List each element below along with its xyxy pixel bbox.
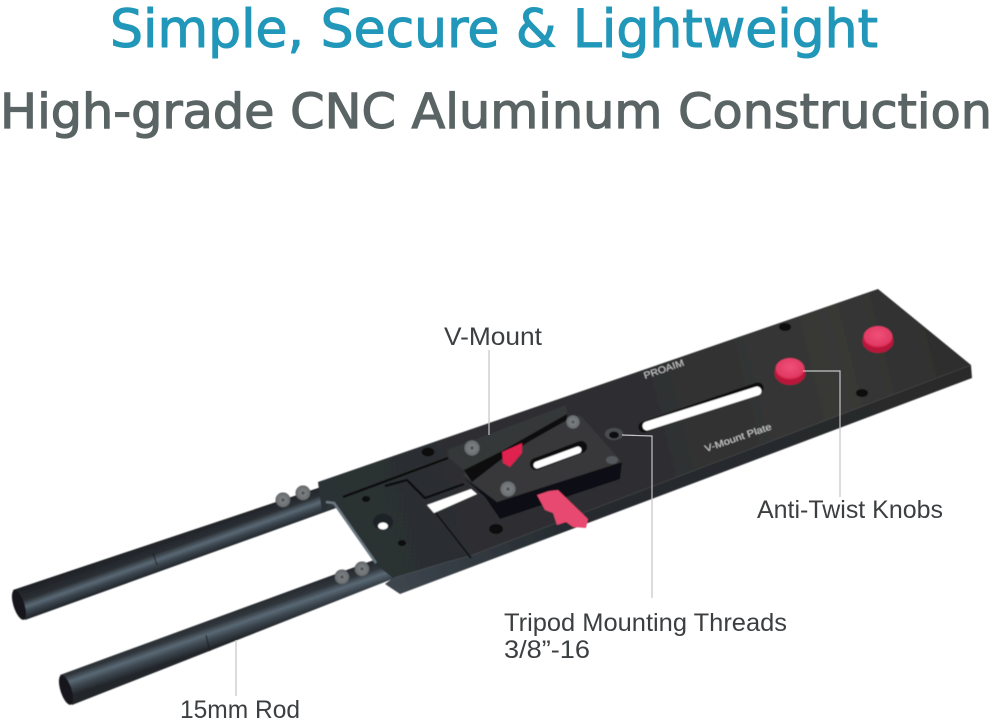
window bevel	[326, 502, 376, 563]
label: V-Mount: V-Mount	[444, 323, 542, 351]
step edge	[435, 512, 471, 558]
upper slot	[644, 388, 758, 427]
screws on rods	[276, 486, 370, 584]
inner panel edge	[385, 480, 464, 498]
lever: pink release	[502, 443, 522, 467]
subtitle: High-grade CNC Aluminum Construction	[0, 84, 992, 140]
label: V-Mount	[444, 323, 542, 435]
screws on V-mount	[464, 415, 618, 497]
hole: center mounting	[373, 514, 393, 530]
groove	[343, 458, 448, 497]
hole: tripod mounting thread	[605, 428, 623, 440]
holes	[362, 323, 868, 546]
plate: front face	[385, 365, 972, 594]
knob: anti-twist rear	[862, 326, 894, 353]
lower slot	[427, 489, 477, 513]
knob: anti-twist front	[774, 358, 806, 385]
label: Tripod Mounting Threads	[504, 435, 787, 664]
product: V-mount plate with rods	[9, 289, 972, 706]
engraving: plate name: V-Mount Plate	[703, 422, 773, 455]
engraving: brand: PROAIM	[642, 358, 686, 382]
plate: top surface	[318, 289, 971, 578]
label: Tripod Mounting Threads: 3/8”-16	[504, 636, 590, 664]
rod: upper 15mm rod	[9, 484, 336, 621]
label: Anti-Twist Knobs: Anti-Twist Knobs	[757, 496, 943, 524]
label: Anti-Twist Knobs	[757, 371, 943, 524]
title: Simple, Secure & Lightweight	[110, 0, 878, 60]
rod: lower 15mm rod	[56, 556, 395, 706]
V-mount: base plate	[463, 416, 622, 519]
label: Tripod Mounting Threads: Tripod Mounting Threads	[504, 609, 787, 637]
V-mount: upper wedge	[448, 405, 567, 482]
label: 15mm Rod	[180, 640, 300, 722]
latch: pink tab	[537, 490, 588, 528]
